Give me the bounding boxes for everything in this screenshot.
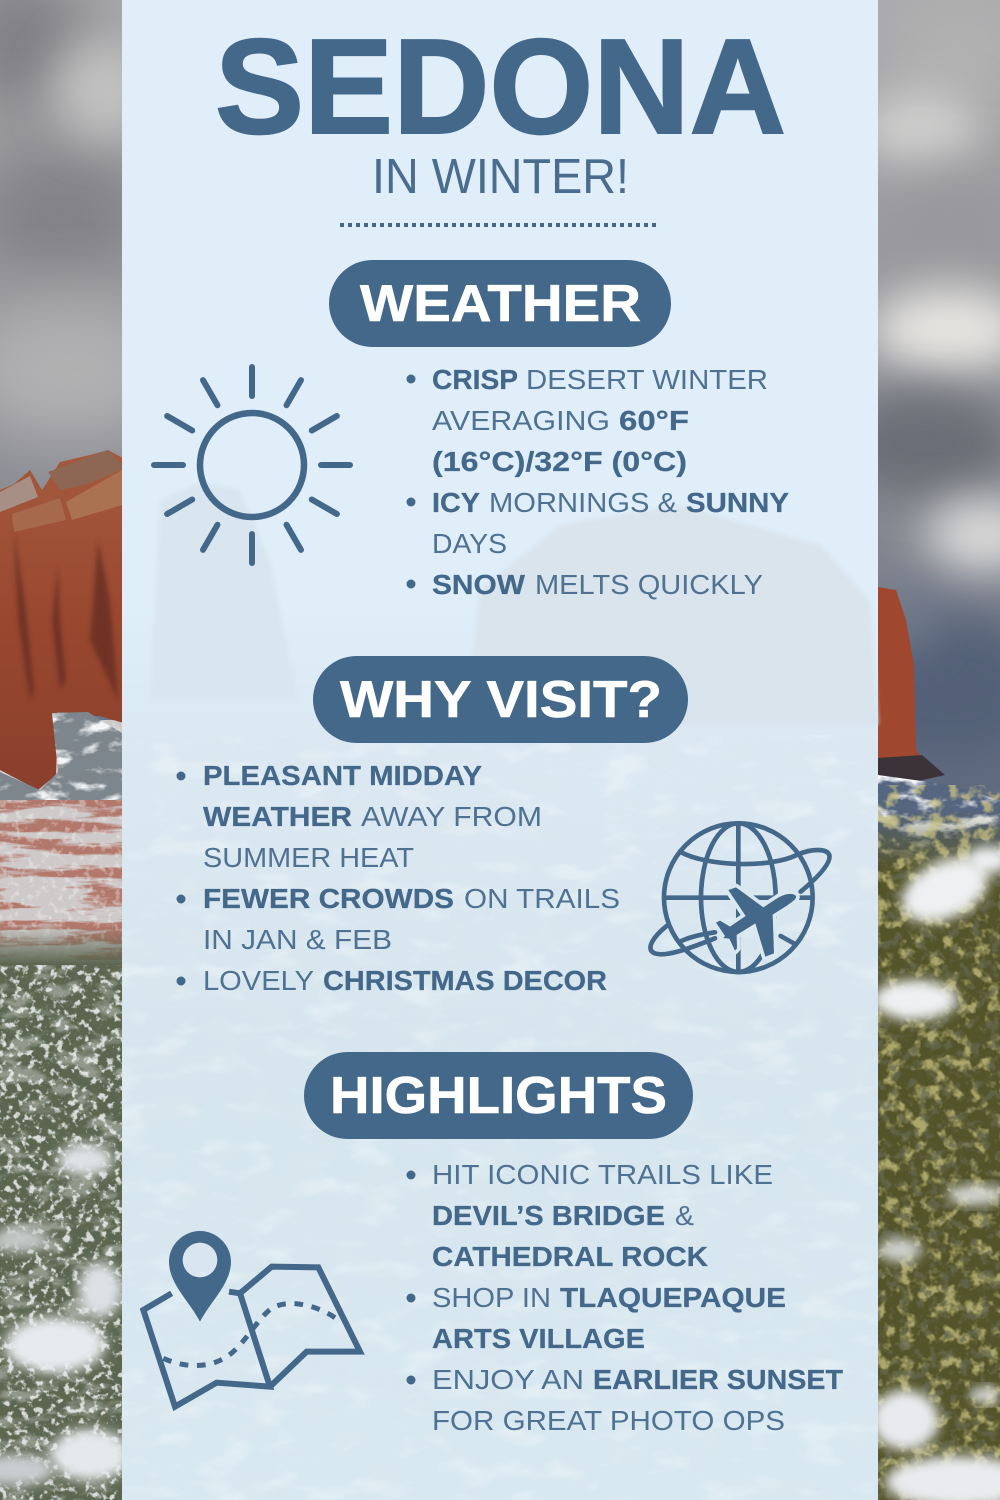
text block: why visit bullets: SUMMER HEAT — [203, 842, 414, 873]
text block: highlights bullets: ARTS VILLAGE — [432, 1323, 645, 1354]
text block: highlights bullets: TLAQUEPAQUE — [560, 1282, 786, 1313]
sky and clouds — [0, 0, 1000, 800]
icon: globe with airplane — [650, 823, 830, 972]
heading: why visit — [313, 656, 688, 743]
heading: weather — [329, 260, 671, 347]
text block: weather bullets: MELTS QUICKLY — [535, 569, 763, 600]
distant ground: snow and red strata on the left — [0, 720, 130, 970]
heading: highlights — [304, 1052, 693, 1139]
text block: highlights bullets: SHOP IN — [432, 1282, 551, 1313]
airplane — [716, 887, 796, 957]
text block: why visit bullets: CHRISTMAS DECOR — [323, 965, 607, 996]
text block: highlights bullets: EARLIER SUNSET — [593, 1364, 843, 1395]
heading: weather: WEATHER — [360, 275, 641, 333]
text block: why visit bullets: PLEASANT MIDDAY — [203, 760, 482, 791]
title: SEDONA — [215, 11, 786, 162]
text block: weather bullets: (16°C)/32°F (0°C) — [432, 446, 687, 477]
text block: highlights bullets: CATHEDRAL ROCK — [432, 1241, 708, 1272]
text block: why visit bullets: LOVELY — [203, 965, 314, 996]
icon: folded map with location pin — [143, 1231, 360, 1407]
left red rock formation — [0, 450, 130, 800]
text block: why visit bullets: FEWER CROWDS — [203, 883, 454, 914]
text block: highlights bullets: FOR GREAT PHOTO OPS — [432, 1405, 785, 1436]
heading: highlights: HIGHLIGHTS — [330, 1067, 667, 1125]
text block: weather bullets: SNOW — [432, 569, 525, 600]
shrubs and snow, right — [871, 785, 1000, 1500]
right red rock spire — [878, 587, 1000, 900]
text block: why visit bullets: IN JAN & FEB — [203, 924, 392, 955]
heading: why visit: WHY VISIT? — [340, 671, 662, 729]
text block: weather bullets: 60°F — [619, 405, 689, 436]
icon: sun — [154, 367, 350, 563]
text block: why visit bullets: WEATHER — [203, 801, 352, 832]
text block: weather bullets — [406, 364, 789, 600]
text block: weather bullets: SUNNY — [686, 487, 789, 518]
text block: highlights bullets: & — [675, 1200, 694, 1231]
text block: weather bullets: CRISP — [432, 364, 518, 395]
text block: highlights bullets: DEVIL’S BRIDGE — [432, 1200, 665, 1231]
text block: weather bullets: ICY — [432, 487, 480, 518]
text block: why visit bullets — [176, 760, 620, 996]
text block: highlights bullets: HIT ICONIC TRAILS LIKE — [432, 1159, 773, 1190]
text block: why visit bullets: ON TRAILS — [464, 883, 620, 914]
text block: why visit bullets: AWAY FROM — [361, 801, 542, 832]
text block: weather bullets: DAYS — [432, 528, 507, 559]
text block: weather bullets: AVERAGING — [432, 405, 610, 436]
text block: highlights bullets: ENJOY AN — [432, 1364, 584, 1395]
text block: highlights bullets — [406, 1159, 843, 1436]
faded cathedral rock towers behind panel — [150, 482, 878, 725]
location pin — [169, 1231, 231, 1322]
subtitle: IN WINTER! — [372, 150, 629, 204]
panel: translucent light blue column — [122, 0, 878, 1500]
shrubs and snow, left — [0, 925, 130, 1500]
text block: weather bullets: MORNINGS & — [489, 487, 677, 518]
faded snowy ground behind panel — [122, 735, 878, 1500]
text block: weather bullets: DESERT WINTER — [526, 364, 768, 395]
